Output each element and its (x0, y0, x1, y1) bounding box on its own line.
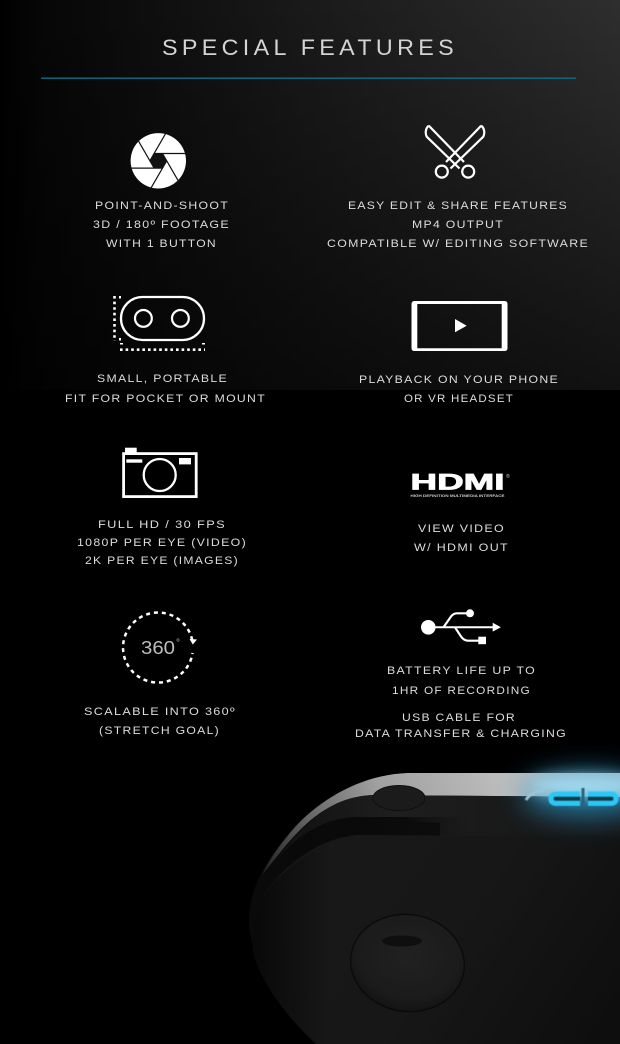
feature: usb (355, 609, 567, 740)
device top button (373, 786, 425, 810)
text: small portable: FIT FOR POCKET OR MOUNT (65, 393, 266, 405)
text: full hd: 2K PER EYE (IMAGES) (85, 555, 239, 567)
feature: hdmi (410, 470, 510, 554)
text: easy edit: EASY EDIT & SHARE FEATURES (348, 200, 568, 212)
icon: 360 dashed circle: ° (176, 638, 180, 649)
text: playback: PLAYBACK ON YOUR PHONE (359, 374, 559, 386)
device shell (249, 773, 620, 1044)
text: scalable 360: (STRETCH GOAL) (99, 725, 220, 737)
text: hdmi: W/ HDMI OUT (414, 542, 509, 554)
icon: dual-lens body (114, 296, 205, 350)
icon: hdmi logo: HIGH DEFINITION MULTIMEDIA INTERFACE (410, 494, 505, 498)
device mid band right (440, 797, 620, 836)
text: playback (359, 374, 559, 405)
text: easy edit (327, 200, 589, 250)
icon: video player (412, 301, 508, 351)
text: point-and-shoot: WITH 1 BUTTON (106, 238, 217, 250)
text: usb: 1HR OF RECORDING (392, 685, 531, 697)
icon: camera (124, 448, 196, 497)
text: scalable 360 (84, 706, 236, 737)
text: point-and-shoot: 3D / 180º FOOTAGE (93, 219, 230, 231)
feature: easy edit (327, 126, 589, 250)
text: usb: BATTERY LIFE UP TO (387, 665, 536, 677)
feature: playback (359, 301, 559, 405)
text: point-and-shoot: POINT-AND-SHOOT (95, 200, 229, 212)
icon: usb symbol (421, 609, 501, 644)
title: SPECIAL FEATURES (162, 35, 458, 60)
feature: full hd (77, 448, 247, 567)
text: point-and-shoot (93, 200, 230, 250)
device logo (526, 788, 616, 807)
text: scalable 360: SCALABLE INTO 360º (84, 706, 236, 718)
device glow core (530, 776, 620, 796)
text: full hd: 1080P PER EYE (VIDEO) (77, 537, 247, 549)
text: usb (355, 665, 567, 740)
text: hdmi: VIEW VIDEO (418, 523, 505, 535)
device front face (253, 835, 620, 1044)
device top band (262, 773, 620, 875)
text: full hd (77, 519, 247, 567)
device mid band (270, 795, 620, 870)
icon: 360 dashed circle (123, 613, 197, 683)
text: easy edit: COMPATIBLE W/ EDITING SOFTWARE (327, 238, 589, 250)
feature: small portable (65, 296, 266, 405)
device blue glow (522, 772, 620, 816)
icon: hdmi logo (410, 470, 510, 498)
text: usb: DATA TRANSFER & CHARGING (355, 728, 567, 740)
icon: camera shutter (129, 132, 187, 190)
icon: hdmi logo: HDMI (410, 470, 504, 494)
device lens (344, 907, 471, 1019)
text: hdmi (414, 523, 509, 554)
text: small portable (65, 373, 266, 405)
icon: 360 dashed circle: 360 (141, 638, 175, 658)
device dark stripe (257, 817, 470, 913)
device face left edge shading (253, 842, 330, 1044)
text: usb: USB CABLE FOR (402, 712, 516, 724)
feature: point-and-shoot (93, 132, 230, 250)
text: playback: OR VR HEADSET (404, 393, 514, 405)
text: small portable: SMALL, PORTABLE (97, 373, 228, 385)
feature: scalable 360 (84, 613, 236, 737)
icon: hdmi logo: ® (506, 473, 510, 480)
text: full hd: FULL HD / 30 FPS (98, 519, 226, 531)
text: easy edit: MP4 OUTPUT (412, 219, 504, 231)
device: camera body (249, 772, 620, 1044)
icon: scissors (426, 126, 484, 178)
